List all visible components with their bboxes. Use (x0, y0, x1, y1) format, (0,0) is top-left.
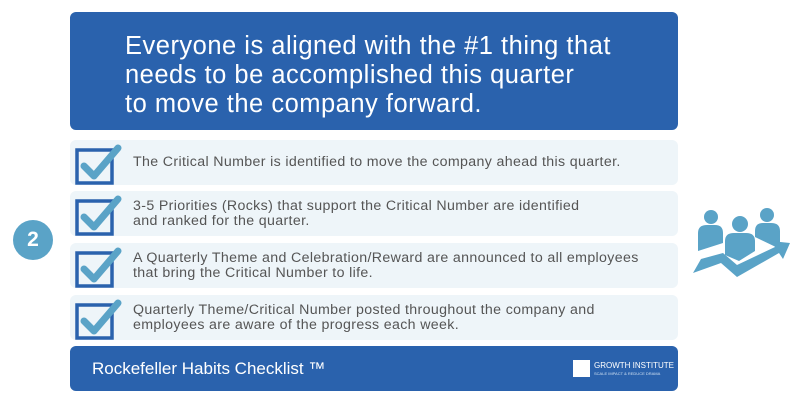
title: needs to be accomplished this quarter (125, 61, 574, 89)
step number (13, 220, 53, 260)
footer (70, 346, 678, 391)
checklist row 3 (70, 243, 678, 288)
text: The Critical Number is identified to move the company ahead this quarter. (133, 154, 621, 170)
text: A Quarterly Theme and Celebration/Reward are announced to all employees (133, 250, 639, 266)
text: employees are aware of the progress each week. (133, 316, 459, 332)
icon: checkbox (75, 300, 122, 340)
text: Quarterly Theme/Critical Number posted throughout the company and (133, 302, 595, 318)
text: that bring the Critical Number to life. (133, 264, 373, 280)
logo (573, 360, 674, 377)
step number: 2 (27, 228, 39, 251)
text (133, 198, 579, 228)
logo: GROWTH INSTITUTE (594, 361, 674, 370)
text: 3-5 Priorities (Rocks) that support the Critical Number are identified (133, 198, 579, 214)
footer title: Rockefeller Habits Checklist ™ (92, 359, 325, 378)
icon: checkbox (75, 144, 122, 185)
text (133, 302, 595, 332)
title: to move the company forward. (125, 90, 482, 118)
checklist row 2 (70, 191, 678, 236)
text (133, 250, 639, 280)
icon: checkbox (75, 248, 122, 288)
title (70, 12, 678, 130)
icon: team with arrow (693, 208, 790, 277)
text: and ranked for the quarter. (133, 212, 310, 228)
title: Everyone is aligned with the #1 thing that (125, 32, 611, 60)
checklist row 4 (70, 295, 678, 340)
icon: checkbox (75, 196, 122, 236)
logo: SCALE IMPACT & REDUCE DRAMA (594, 371, 660, 376)
checklist row 1 (70, 140, 678, 185)
